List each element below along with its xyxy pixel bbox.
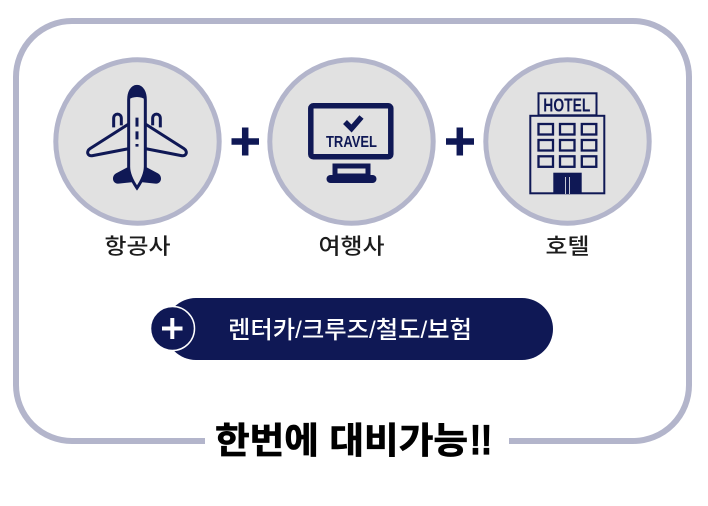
icon: hotel building: [530, 93, 604, 194]
pill background: [165, 298, 553, 360]
hotel item: [486, 60, 649, 259]
plus sign 2: [446, 128, 474, 156]
circle: hotel: [486, 60, 649, 223]
label: airline: 항공사: [104, 234, 170, 259]
icon: airplane: [88, 85, 186, 188]
panel: rounded frame: [16, 21, 689, 441]
icon: travel monitor: [311, 106, 391, 183]
title: !!: [470, 416, 492, 463]
plus badge: [150, 306, 194, 350]
title: 한번에 대비가능: [215, 420, 468, 461]
circle: travel agency: [270, 60, 433, 223]
icon: travel monitor: TRAVEL: [326, 134, 377, 151]
icon: hotel building: HOTEL: [543, 96, 590, 116]
label: travel agency: 여행사: [318, 234, 384, 259]
pill text: 렌터카/크루즈/철도/보험: [228, 317, 472, 344]
travel agency item: [270, 60, 433, 259]
extras pill: [150, 298, 553, 360]
plus sign 1: [232, 128, 259, 156]
airline item: [56, 60, 219, 259]
circle: airline: [56, 60, 219, 223]
label: hotel: 호텔: [546, 234, 590, 259]
